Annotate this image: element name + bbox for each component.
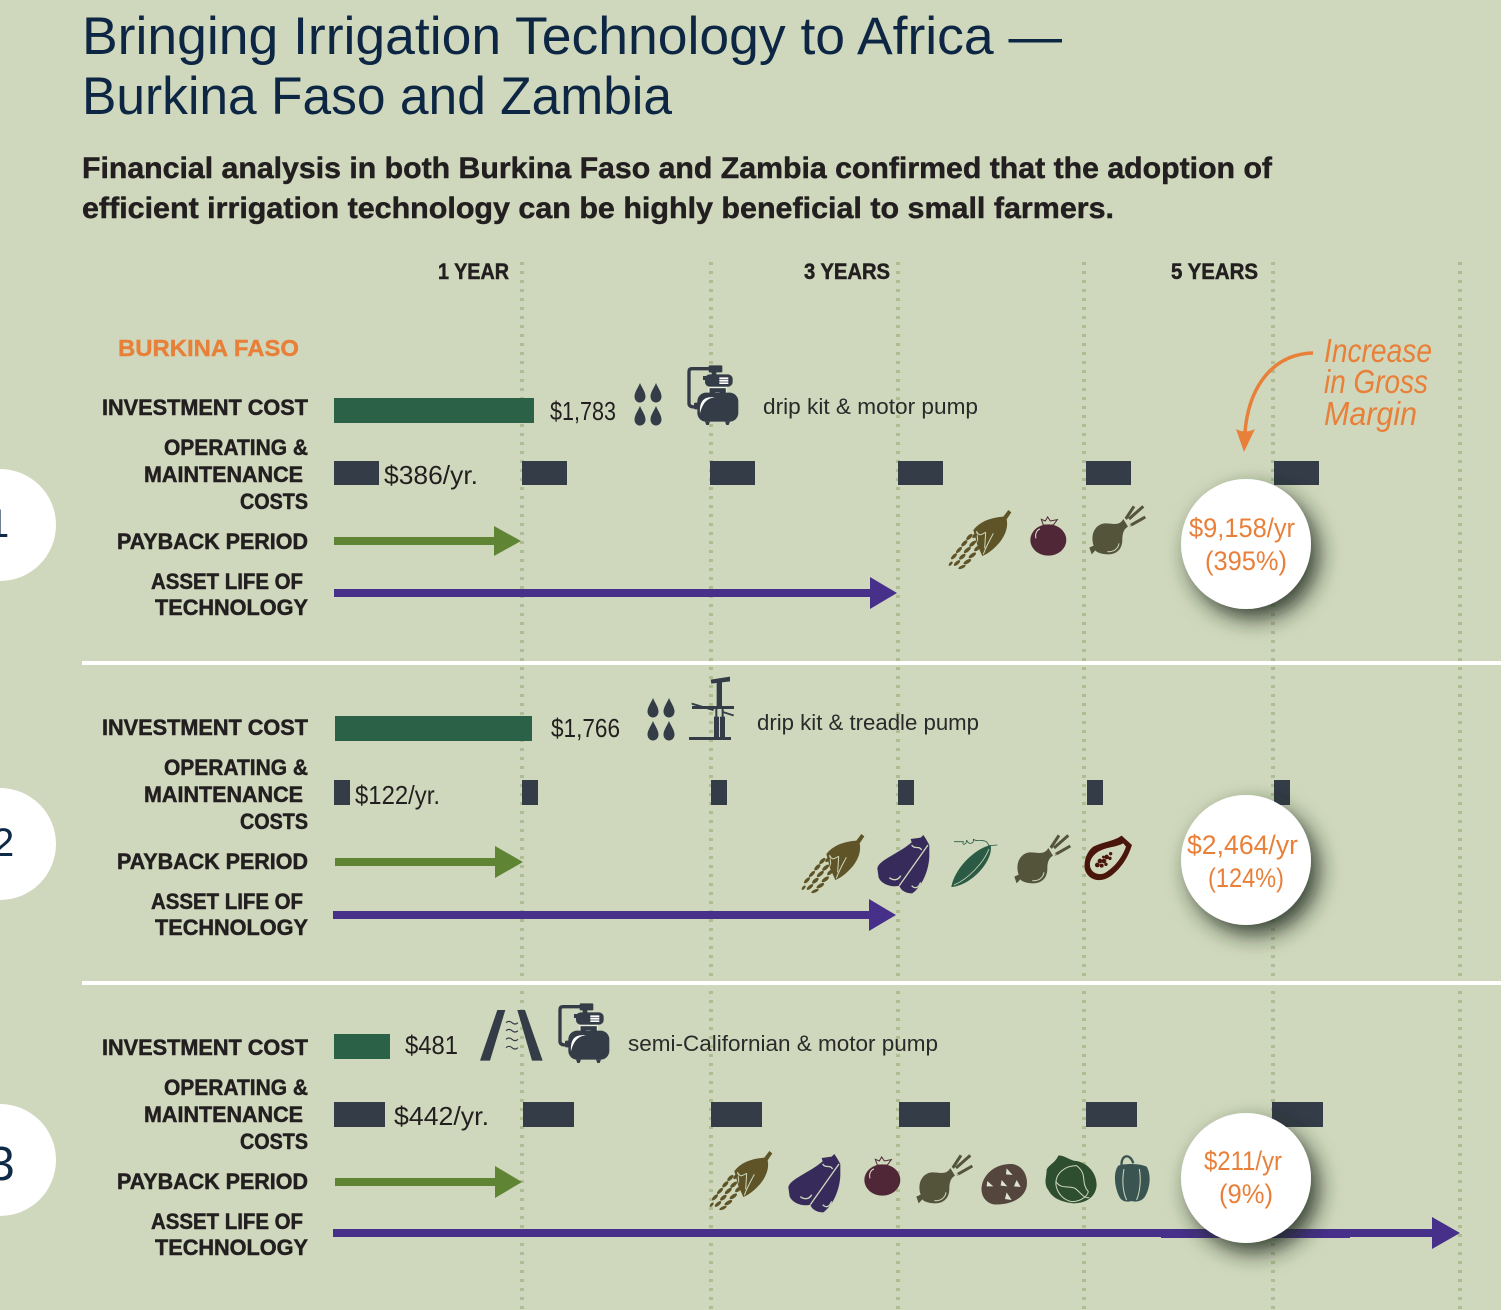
number badge 1 (0, 469, 56, 581)
annotation: increase in gross margin: in Gross (1324, 363, 1428, 400)
panel: scenario 2 (0, 677, 1311, 940)
icon: water drops 2 (648, 698, 674, 740)
asset life arrow 1 (334, 577, 897, 609)
operating cost bars 3 (334, 1102, 1323, 1127)
crop icons 3 (709, 1151, 1150, 1212)
icon: motor pump 3 (560, 1003, 609, 1063)
annotation: increase in gross margin: Margin (1324, 395, 1417, 432)
operating cost value 1: $386/yr. (384, 460, 478, 490)
investment bar 2 (335, 716, 532, 741)
timeline year labels: 1 YEAR (438, 259, 509, 284)
payback arrow 1 (334, 526, 521, 556)
arrow: gross margin annotation (1236, 353, 1313, 452)
technology label 3: semi-Californian & motor pump (628, 1031, 938, 1056)
payback arrow 3 (335, 1166, 522, 1198)
subtitle: efficient irrigation technology can be highly beneficial to small farmers. (82, 192, 1114, 225)
gross margin callout 3: (9%) (1219, 1179, 1273, 1209)
technology label 1: drip kit & motor pump (763, 394, 978, 419)
row labels 3: PAYBACK PERIOD (117, 1169, 308, 1194)
row labels 1: ASSET LIFE OF (151, 569, 303, 594)
gross margin callout 2 (1181, 795, 1311, 925)
timeline year labels: 5 YEARS (1171, 259, 1258, 284)
crop icons 2 (801, 834, 1132, 894)
investment value 1: $1,783 (550, 396, 616, 426)
asset life arrow 2 (333, 899, 896, 931)
subtitle (82, 152, 1273, 225)
title: Bringing Irrigation Technology to Africa — (82, 7, 1062, 66)
icon: treadle pump (689, 677, 734, 740)
payback arrow 2 (335, 846, 523, 878)
gross margin callout 1: (395%) (1205, 546, 1287, 576)
annotation: increase in gross margin: Increase (1324, 332, 1432, 369)
row labels 2: COSTS (240, 809, 308, 834)
row labels 3 (102, 1035, 309, 1260)
operating cost value 2: $122/yr. (355, 780, 440, 810)
row labels 3: COSTS (240, 1129, 308, 1154)
title (82, 7, 1062, 126)
operating cost bars 1 (334, 461, 1319, 485)
subtitle: Financial analysis in both Burkina Faso and Zambia confirmed that the adoption of (82, 152, 1273, 185)
row labels 1: TECHNOLOGY (155, 595, 308, 620)
icon: motor pump (689, 365, 738, 425)
row labels 3: ASSET LIFE OF (151, 1209, 303, 1234)
dividers (82, 661, 1501, 665)
investment bar 3 (334, 1034, 390, 1059)
annotation: increase in gross margin (1324, 332, 1432, 432)
row labels 1: MAINTENANCE (144, 462, 303, 487)
gross margin callout 2: (124%) (1208, 863, 1284, 893)
operating cost bars 2 (334, 780, 1290, 805)
investment bar 1 (334, 398, 534, 423)
operating cost value 3: $442/yr. (394, 1101, 489, 1131)
gross margin callout 3: $211/yr (1204, 1146, 1282, 1176)
heading: Burkina Faso: BURKINA FASO (118, 335, 299, 361)
asset life arrow 3 (333, 1217, 1460, 1249)
number badge 3 (0, 1104, 56, 1216)
panel: scenario 3 (0, 1003, 1460, 1260)
icon: semi-Californian system (480, 1010, 543, 1061)
technology label 2: drip kit & treadle pump (757, 710, 979, 735)
row labels 2: OPERATING & (164, 755, 308, 780)
investment value 3: $481 (405, 1030, 458, 1060)
timeline year labels (438, 259, 1258, 284)
row labels 3: OPERATING & (164, 1075, 308, 1100)
row labels 2: MAINTENANCE (144, 782, 303, 807)
row labels 3: INVESTMENT COST (102, 1035, 309, 1060)
row labels 2: PAYBACK PERIOD (117, 849, 308, 874)
icon: water drops (634, 383, 662, 426)
timeline year labels: 3 YEARS (804, 259, 890, 284)
crop icons 1 (948, 506, 1145, 570)
row labels 3: TECHNOLOGY (155, 1235, 308, 1260)
row labels 1: PAYBACK PERIOD (117, 529, 308, 554)
row labels 1 (102, 395, 309, 620)
gross margin callout 2: $2,464/yr (1187, 830, 1298, 860)
row labels 1: OPERATING & (164, 435, 308, 460)
panel: scenario 1 (0, 332, 1432, 620)
number badge 2 (0, 788, 56, 900)
row labels 2: INVESTMENT COST (102, 715, 309, 740)
row labels 1: COSTS (240, 489, 308, 514)
row labels 2: ASSET LIFE OF (151, 889, 303, 914)
gross margin callout 1 (1181, 479, 1311, 609)
row labels 2: TECHNOLOGY (155, 915, 308, 940)
gross margin callout 1: $9,158/yr (1189, 513, 1295, 543)
row labels 3: MAINTENANCE (144, 1102, 303, 1127)
row labels 1: INVESTMENT COST (102, 395, 309, 420)
row labels 2 (102, 715, 309, 940)
gross margin callout 3 (1181, 1113, 1311, 1243)
investment value 2: $1,766 (551, 713, 620, 743)
title: Burkina Faso and Zambia (82, 67, 672, 126)
